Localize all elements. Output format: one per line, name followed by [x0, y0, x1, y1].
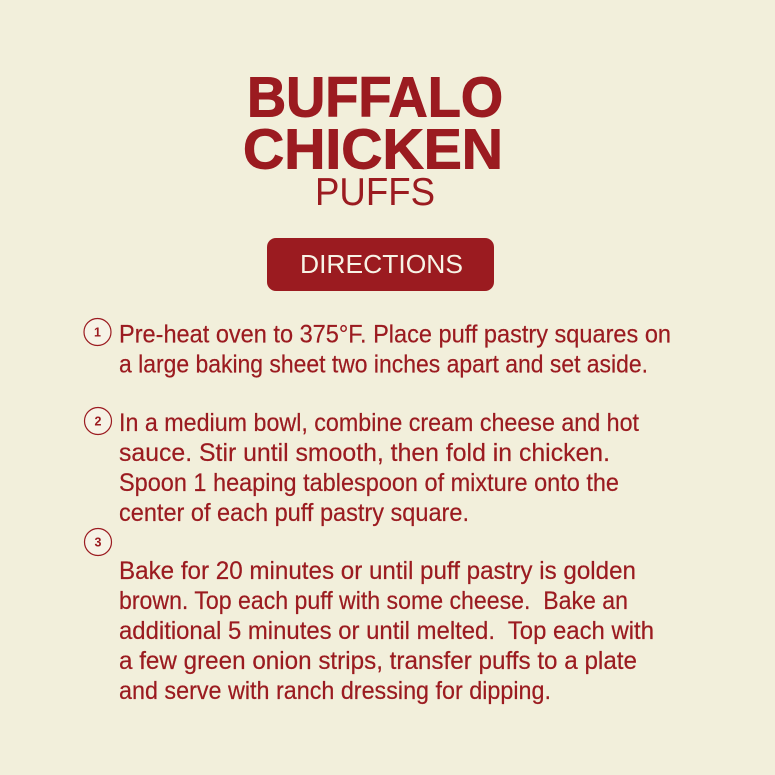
- icon: number 3 badge: 3: [95, 536, 102, 550]
- icon: number 1 badge: [84, 318, 111, 346]
- icon: number 2 badge: 2: [95, 414, 102, 428]
- step 2: [84, 408, 639, 527]
- step 1 text: a large baking sheet two inches apart and set aside.: [119, 350, 648, 378]
- icon: number 2 badge: [84, 408, 112, 434]
- title: [243, 66, 503, 214]
- step 2 text: Spoon 1 heaping tablespoon of mixture onto the: [119, 469, 619, 497]
- step 2 text: [119, 409, 639, 527]
- icon: number 1 badge: 1: [94, 326, 101, 340]
- step 3 text: and serve with ranch dressing for dipping.: [119, 677, 551, 705]
- step 3 text: a few green onion strips, transfer puffs to a plate: [119, 647, 637, 675]
- step 3 text: Bake for 20 minutes or until puff pastry is golden: [119, 557, 636, 585]
- step 3 text: additional 5 minutes or until melted. Top each with: [119, 617, 654, 645]
- icon: number 3 badge: [84, 528, 112, 556]
- step 1: [84, 318, 671, 378]
- directions heading button: [267, 238, 494, 291]
- title: PUFFS: [315, 171, 435, 214]
- step 1 text: [119, 320, 671, 378]
- step 2 text: sauce. Stir until smooth, then fold in chicken.: [119, 439, 610, 467]
- title: CHICKEN: [243, 118, 503, 182]
- step 3 text: brown. Top each puff with some cheese. Bake an: [119, 587, 628, 615]
- step 2 text: In a medium bowl, combine cream cheese and hot: [119, 409, 639, 437]
- step 1 text: Pre-heat oven to 375°F. Place puff pastry squares on: [119, 320, 671, 348]
- step 3: [84, 528, 654, 705]
- title: BUFFALO: [247, 66, 503, 130]
- step 3 text: [119, 557, 654, 705]
- step 2 text: center of each puff pastry square.: [119, 499, 469, 527]
- directions heading button: DIRECTIONS: [300, 249, 463, 279]
